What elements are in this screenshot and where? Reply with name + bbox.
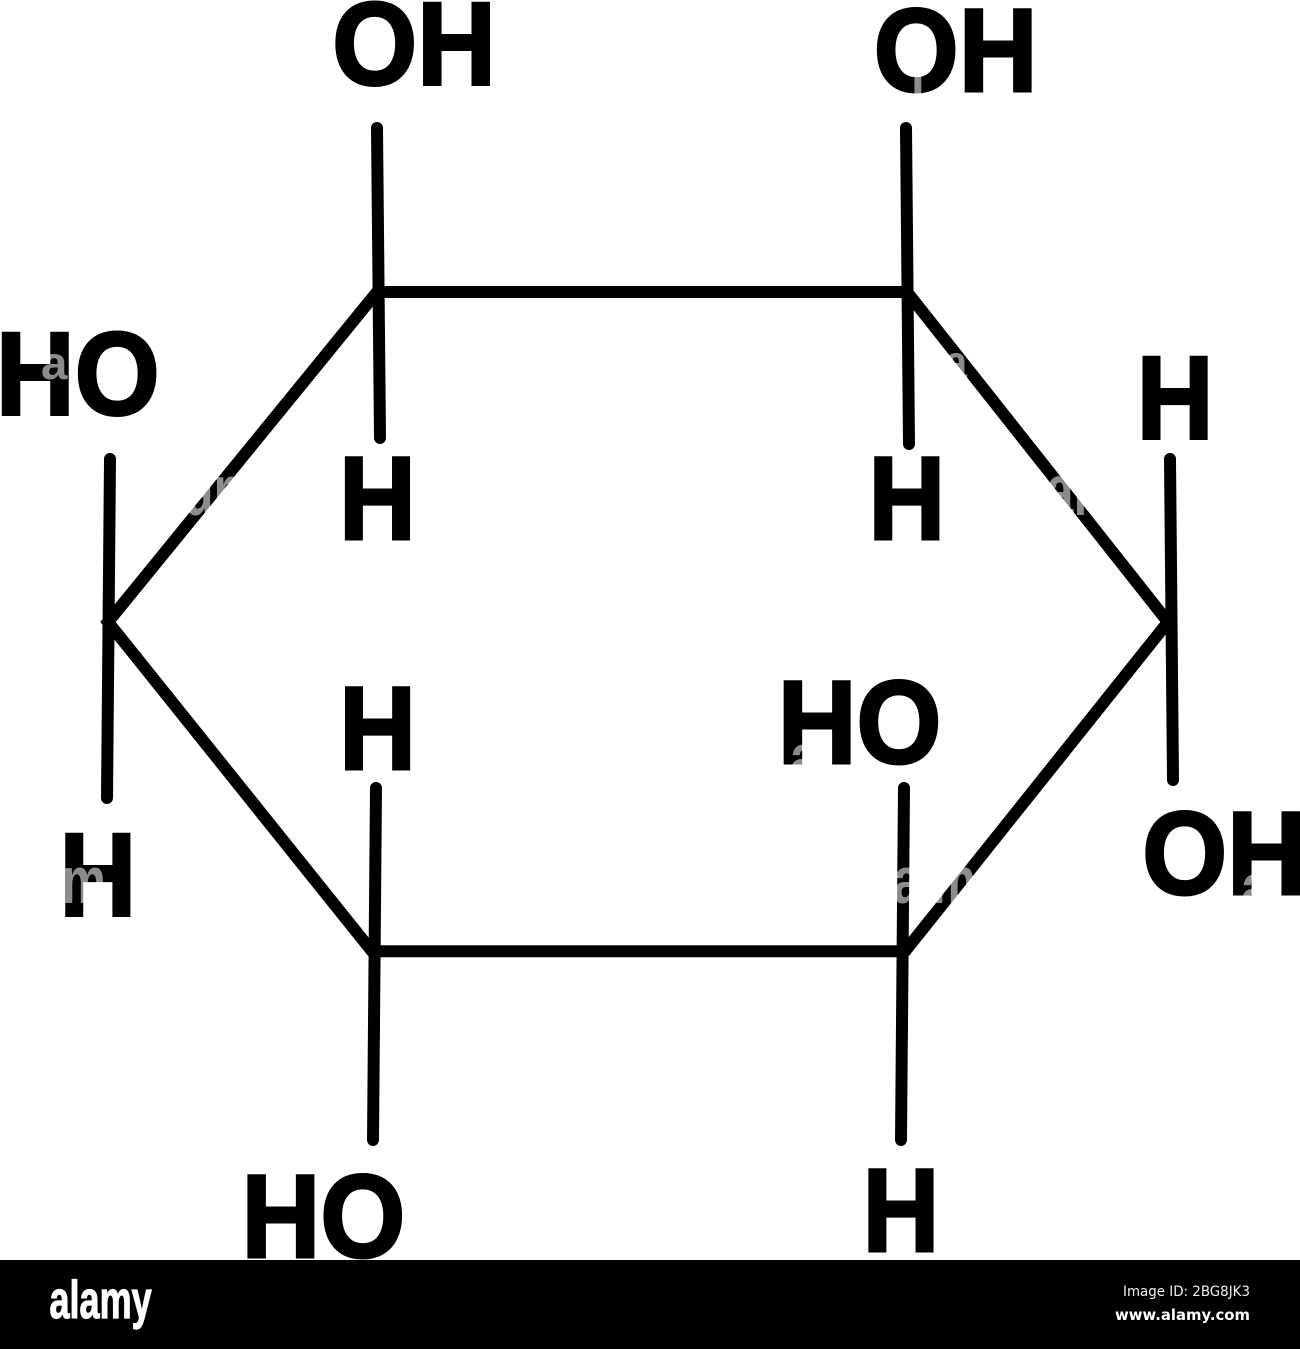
faint watermark fragments: a <box>893 844 921 918</box>
faint watermark fragments <box>41 64 1269 925</box>
hexagonal ring <box>108 292 1168 951</box>
faint watermark fragments: m <box>932 844 976 918</box>
faint watermark fragments: a <box>790 721 818 795</box>
atom labels: H <box>868 432 945 564</box>
atom labels: H <box>1137 331 1214 464</box>
atom labels: HO <box>778 657 941 789</box>
footer logo: alamy <box>50 1270 152 1330</box>
faint watermark fragments: am <box>1046 451 1118 531</box>
faint watermark fragments: a <box>41 338 68 389</box>
atom labels: H <box>60 808 136 941</box>
faint watermark fragments: a <box>945 337 968 389</box>
vertical bonds <box>107 128 1173 1140</box>
atom labels: HO <box>0 309 160 440</box>
atom labels: H <box>863 1144 939 1276</box>
footer bar <box>0 1260 1300 1349</box>
image ID: Image ID: 2BG8JK3 <box>1123 1284 1250 1300</box>
faint watermark fragments: l <box>911 64 925 138</box>
faint watermark fragments: a <box>1241 851 1269 925</box>
atom labels: H <box>339 432 416 564</box>
faint watermark fragments: m <box>62 844 106 918</box>
atom labels: HO <box>242 1151 405 1283</box>
atom labels: H <box>339 662 416 794</box>
faint watermark fragments: am <box>186 451 258 531</box>
website: www.alamy.com <box>1115 1306 1250 1324</box>
